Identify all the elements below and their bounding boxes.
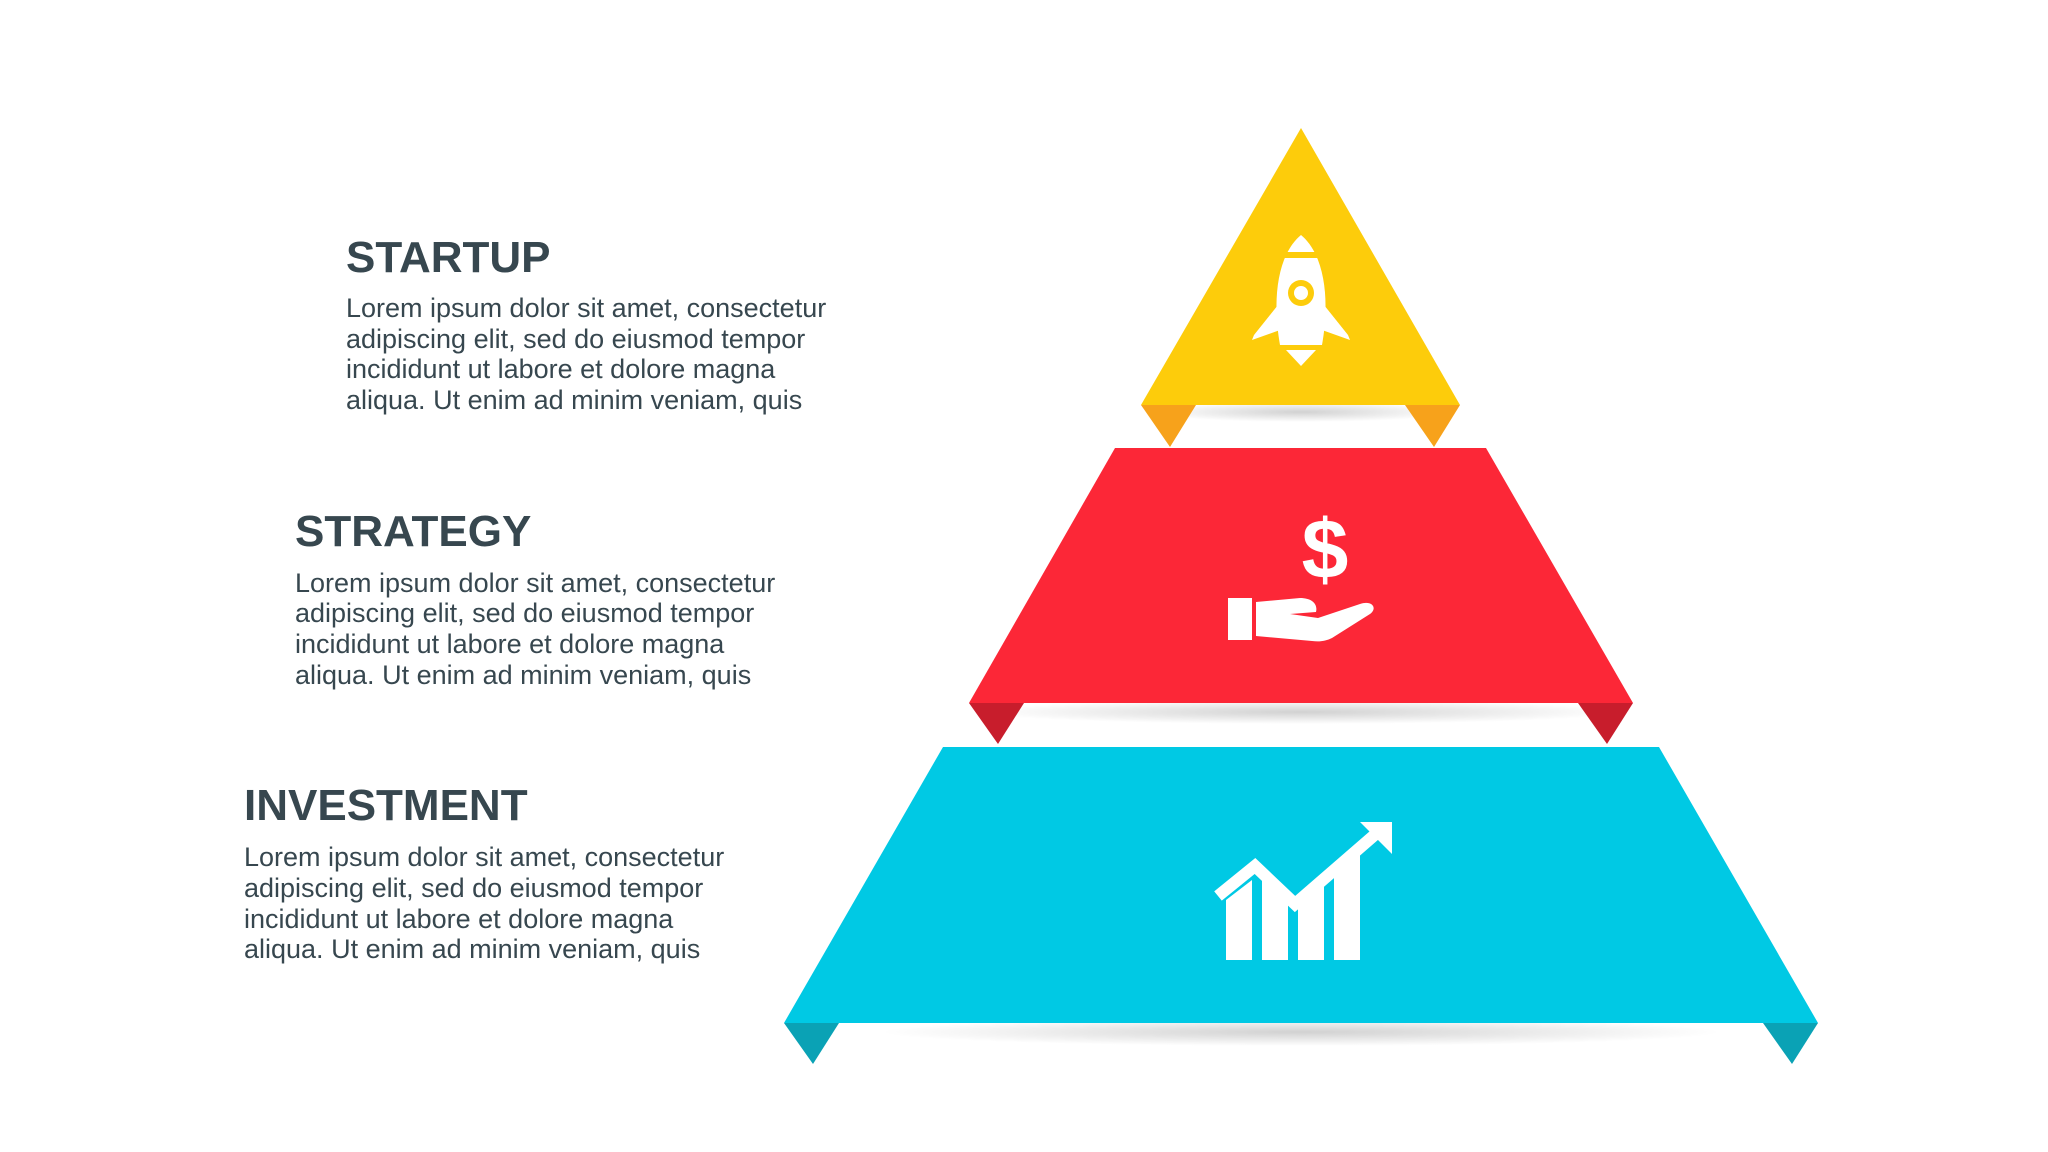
body: startup: Lorem ipsum dolor sit amet, consectetur [346, 293, 826, 323]
body: strategy: incididunt ut labore et dolore magna [295, 629, 725, 659]
body: investment: aliqua. Ut enim ad minim veniam, quis [244, 934, 700, 964]
body: investment: adipiscing elit, sed do eiusmod tempor [244, 873, 703, 903]
text block: strategy [295, 507, 775, 690]
icon: rocket [1252, 235, 1350, 366]
pyramid tier: investment (blue) [784, 747, 1818, 1064]
body: investment: Lorem ipsum dolor sit amet, consectetur [244, 842, 724, 872]
text block: investment [244, 781, 724, 964]
pyramid tier: strategy (red) [969, 448, 1633, 744]
pyramid tier: startup (yellow) [1141, 128, 1460, 447]
icon: growth chart [1218, 822, 1392, 960]
body: startup: adipiscing elit, sed do eiusmod tempor [346, 324, 805, 354]
heading: investment: INVESTMENT [244, 781, 528, 830]
body: startup: aliqua. Ut enim ad minim veniam, quis [346, 385, 802, 415]
body: investment: incididunt ut labore et dolore magna [244, 904, 674, 934]
heading: strategy: STRATEGY [295, 507, 531, 556]
heading: startup: STARTUP [346, 233, 551, 282]
body: strategy: adipiscing elit, sed do eiusmod tempor [295, 598, 754, 628]
icon: dollar in hand: $ [1302, 502, 1348, 596]
body: strategy: Lorem ipsum dolor sit amet, consectetur [295, 568, 775, 598]
body: strategy: aliqua. Ut enim ad minim veniam, quis [295, 660, 751, 690]
text block: startup [346, 233, 826, 415]
icon: dollar in hand [1228, 502, 1374, 641]
body: startup: incididunt ut labore et dolore magna [346, 354, 776, 384]
